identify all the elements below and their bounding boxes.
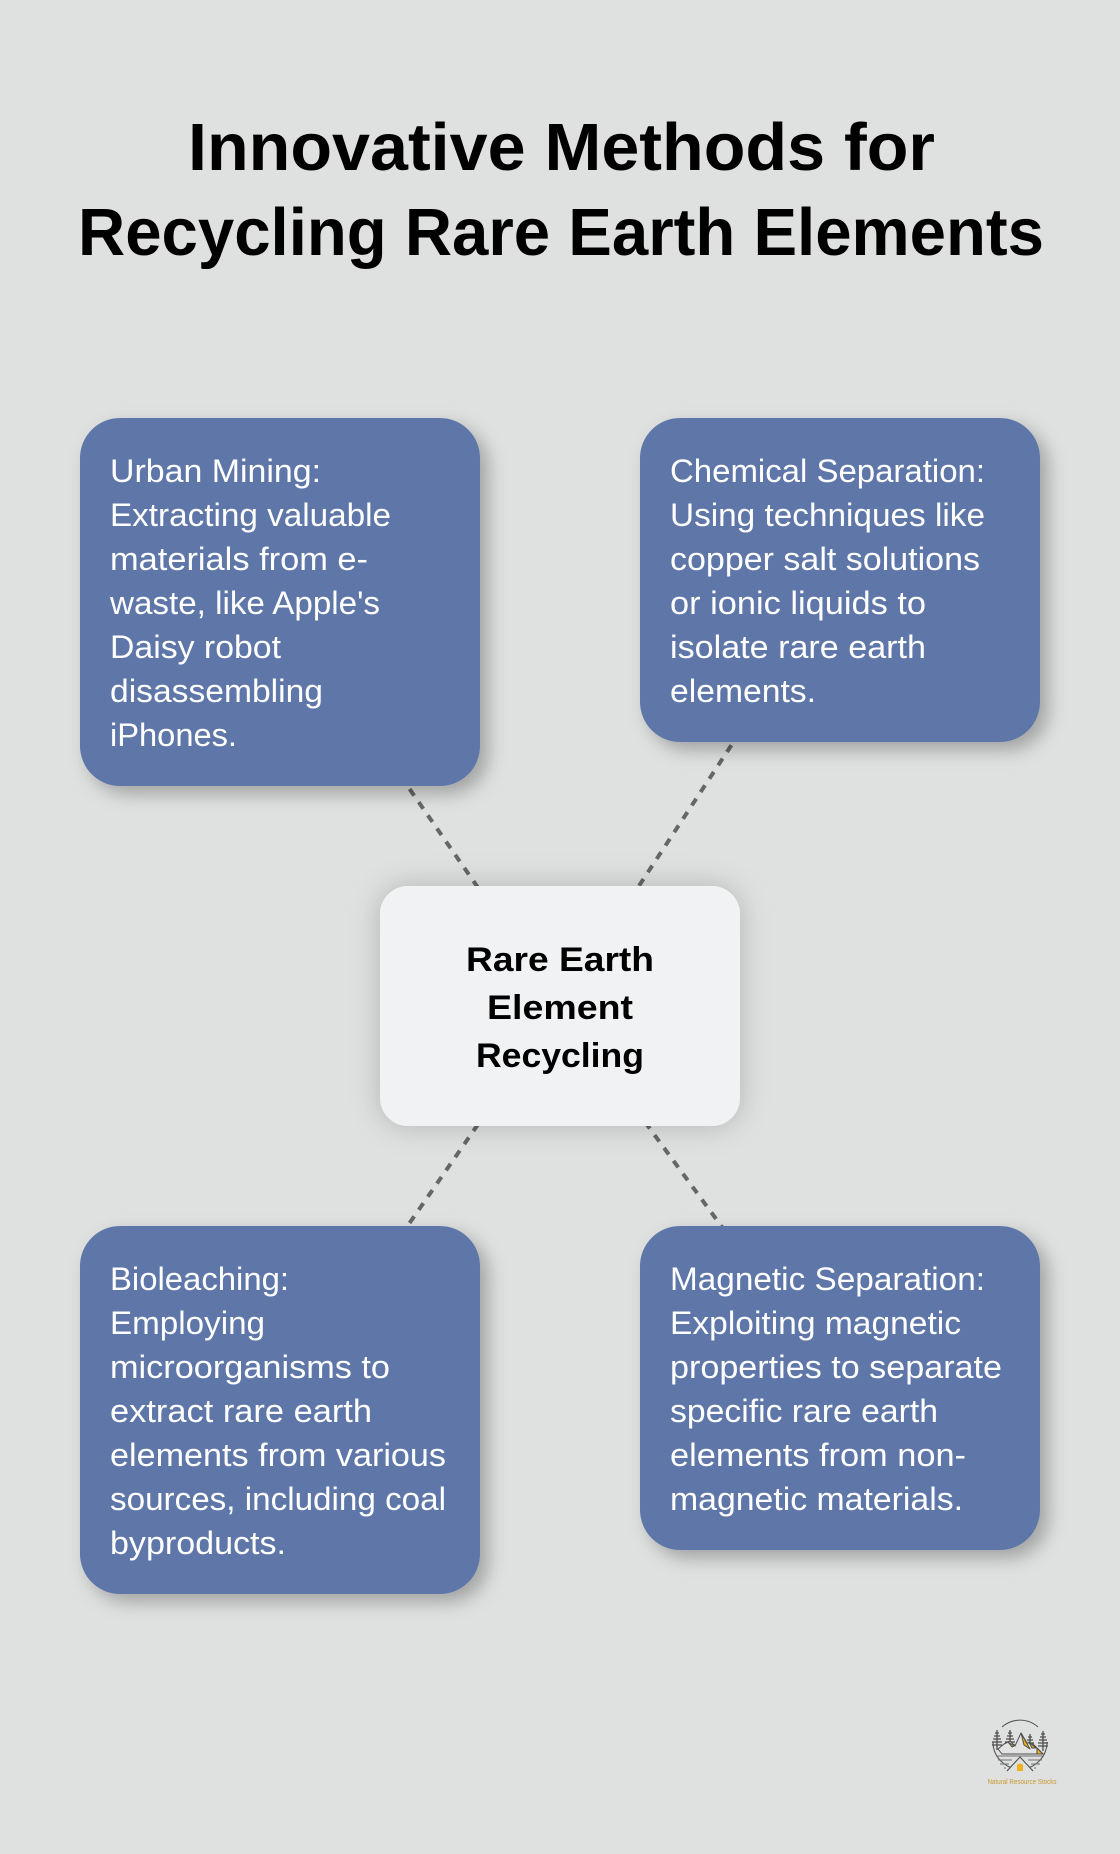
text: chemical separation description: Chemical Separation: — [670, 453, 985, 489]
text: magnetic separation description: elements from non- — [670, 1437, 966, 1473]
connector: chemical separation to centre — [560, 580, 840, 1006]
text: magnetic separation description: specific rare earth — [670, 1393, 938, 1429]
text: bioleaching description: sources, including coal — [110, 1481, 446, 1517]
text: chemical separation description: isolate rare earth — [670, 629, 926, 665]
icon: Natural Resource Stocks logo — [988, 1720, 1057, 1786]
logo mountains — [998, 1733, 1043, 1754]
text: urban mining description: disassembling — [110, 673, 323, 709]
text: urban mining description: materials from e- — [110, 541, 368, 577]
text: bioleaching description: microorganisms to — [110, 1349, 390, 1385]
text: chemical separation description: elements. — [670, 673, 816, 709]
title — [78, 110, 1044, 270]
logo water lines — [996, 1756, 1044, 1768]
text: urban mining description: Daisy robot — [110, 629, 281, 665]
text: bioleaching description: byproducts. — [110, 1525, 286, 1561]
logo trees — [992, 1730, 1048, 1751]
dashed connectors — [280, 580, 840, 1410]
panel: chemical separation — [640, 418, 1040, 742]
title: Recycling Rare Earth Elements — [78, 195, 1044, 270]
text: magnetic separation description: Exploiting magnetic — [670, 1305, 961, 1341]
text: central node label — [466, 941, 654, 1075]
text: magnetic separation description: Magnetic Separation: — [670, 1261, 985, 1297]
connector: magnetic separation to centre — [560, 1006, 840, 1388]
text: magnetic separation description: properties to separate — [670, 1349, 1002, 1385]
text: urban mining description: Extracting valuable — [110, 497, 391, 533]
logo ring — [993, 1720, 1047, 1769]
text: central node label: Element — [487, 989, 633, 1027]
text: magnetic separation description: magnetic materials. — [670, 1481, 963, 1517]
text: magnetic separation description — [670, 1261, 1002, 1517]
title: Innovative Methods for — [188, 110, 935, 185]
logo hut — [1007, 1757, 1033, 1771]
text: chemical separation description: Using techniques like — [670, 497, 985, 533]
text: urban mining description: iPhones. — [110, 717, 237, 753]
text: chemical separation description — [670, 453, 985, 709]
text: bioleaching description: Employing — [110, 1305, 265, 1341]
text: urban mining description: Urban Mining: — [110, 453, 321, 489]
panel: urban mining — [80, 418, 480, 786]
text: central node label: Recycling — [476, 1037, 644, 1075]
text: bioleaching description: elements from various — [110, 1437, 446, 1473]
text: bioleaching description: extract rare earth — [110, 1393, 372, 1429]
connector: bioleaching to centre — [280, 1006, 560, 1410]
text: central node label: Rare Earth — [466, 941, 654, 979]
text: chemical separation description: copper salt solutions — [670, 541, 980, 577]
connector: urban mining to centre — [280, 602, 560, 1006]
text: bioleaching description — [110, 1261, 446, 1561]
text: bioleaching description: Bioleaching: — [110, 1261, 289, 1297]
text: chemical separation description: or ionic liquids to — [670, 585, 926, 621]
panel: bioleaching — [80, 1226, 480, 1594]
logo wordmark: Natural Resource Stocks — [988, 1779, 1057, 1786]
text: urban mining description — [109, 453, 391, 753]
panel: magnetic separation — [640, 1226, 1040, 1550]
text: urban mining description: waste, like Apple's — [109, 585, 380, 621]
panel: central node — [380, 886, 740, 1126]
